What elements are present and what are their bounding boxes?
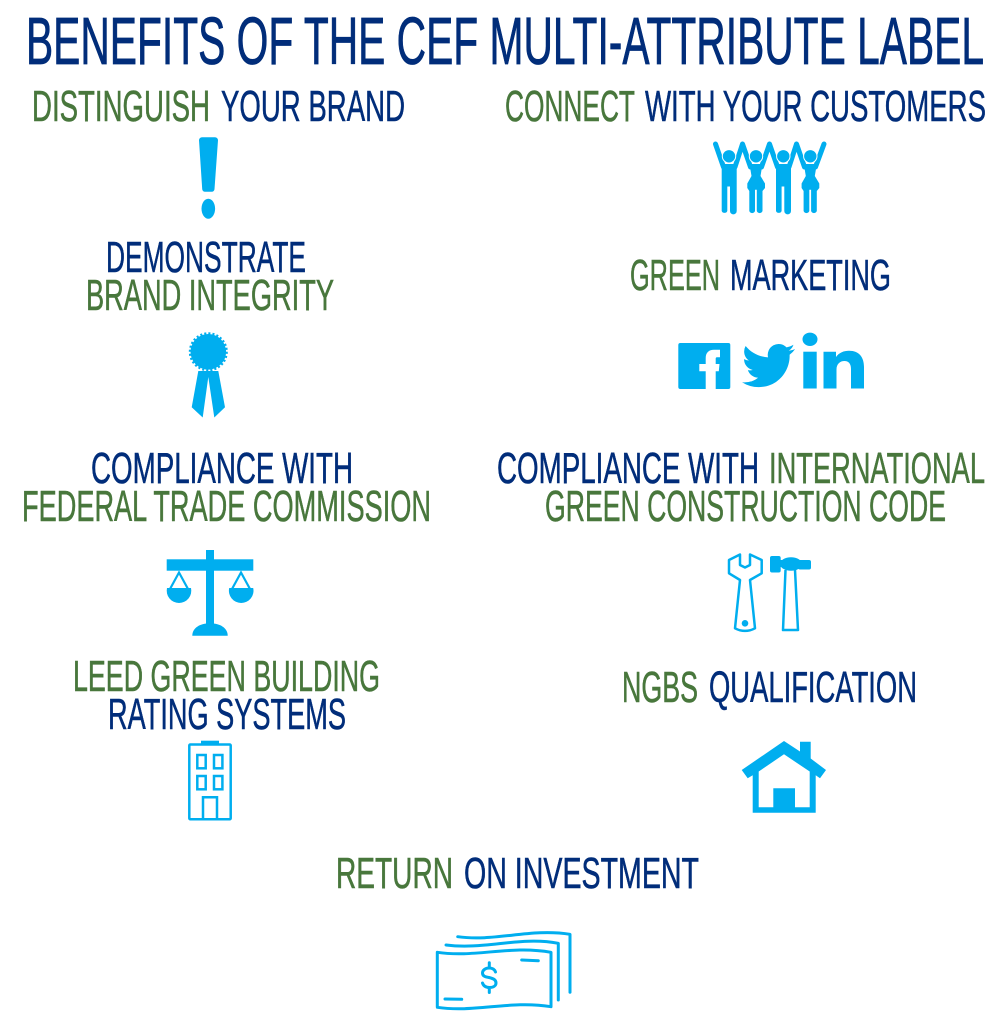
icon: house [742,741,826,813]
heading: green marketing: GREEN [630,252,720,300]
icon: wrench and hammer [729,554,811,631]
icon: stack of banknotes [437,933,570,1009]
heading: leed green building rating systems: RATING SYSTEMS [108,691,346,739]
icon: award ribbon [190,334,226,418]
heading: compliance with federal trade commission: FEDERAL TRADE COMMISSION [22,483,431,531]
icon: exclamation mark [199,137,218,219]
heading: demonstrate brand integrity: DEMONSTRATE [106,234,306,282]
icon: wrench [729,554,762,631]
icon: four people with raised arms [716,144,824,214]
heading: green marketing [630,252,891,300]
heading: connect with your customers [505,83,986,131]
heading: return on investment: ON INVESTMENT [464,850,699,898]
icon: balance scale [167,550,254,636]
heading: compliance with international green construction code: COMPLIANCE WITH [497,445,759,493]
heading: connect with your customers: CONNECT [505,83,635,131]
heading: ngbs qualification [622,664,917,712]
heading: return on investment [336,850,699,898]
icon: office building [189,741,231,819]
icon: linkedin [802,333,864,388]
icon: twitter bird [742,344,795,387]
heading: compliance with federal trade commission [22,445,431,531]
heading: demonstrate brand integrity [86,234,334,320]
heading: ngbs qualification: NGBS [622,664,698,712]
heading: demonstrate brand integrity: BRAND INTEGRITY [86,272,334,320]
icon: facebook [678,343,730,389]
heading: return on investment: RETURN [336,850,453,898]
icon: hammer [770,556,811,630]
icon: social media logos [678,333,864,389]
heading: green marketing: MARKETING [730,252,891,300]
heading: distinguish your brand: YOUR BRAND [221,83,405,131]
heading: compliance with federal trade commission: COMPLIANCE WITH [91,445,353,493]
heading: distinguish your brand: DISTINGUISH [32,83,210,131]
heading: compliance with international green construction code [497,445,985,531]
heading: leed green building rating systems: LEED GREEN BUILDING [73,653,380,701]
heading: leed green building rating systems [73,653,380,739]
